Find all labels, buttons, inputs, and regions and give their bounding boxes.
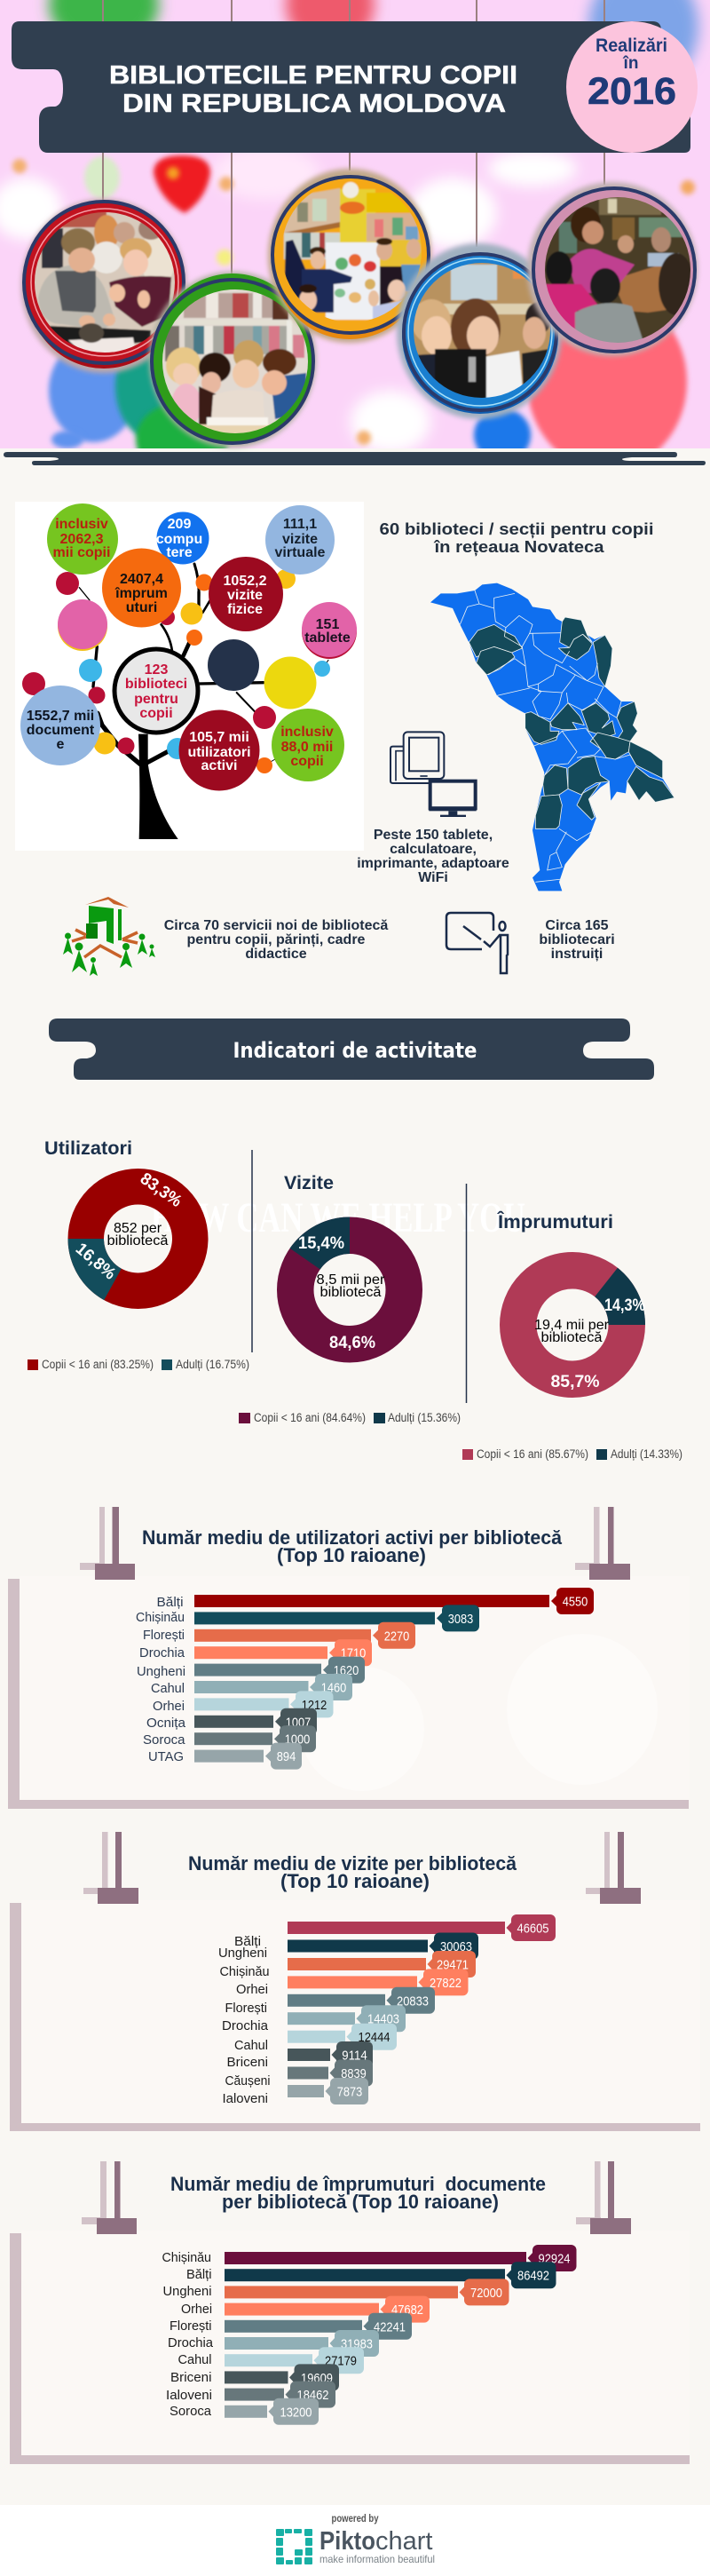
row: Drochia (168, 2330, 379, 2357)
row: Chișinău: 3083 (448, 1612, 473, 1627)
row: Florești (143, 1622, 415, 1649)
row: Briceni: Briceni (170, 2370, 211, 2385)
photo ornament 3: children with handprint poster (268, 169, 431, 343)
bar chart: loans per library (162, 2245, 577, 2425)
row: Drochia: 31983 (341, 2337, 373, 2351)
row: Briceni (227, 2041, 373, 2070)
bubble: 151 tablete: 151 (316, 617, 339, 632)
row: Soroca: Soroca (170, 2404, 212, 2419)
donut chart: Vizite: bibliotecă (320, 1285, 382, 1300)
bubble: 1552,7 mii documente: 1552,7 mii (27, 709, 94, 724)
donut chart: Împrumuturi: 85,7% (550, 1373, 600, 1391)
row: Orhei: 47682 (391, 2303, 423, 2318)
heading: Vizite: Vizite (284, 1173, 334, 1193)
row: Căușeni: 8839 (341, 2066, 367, 2081)
footer (0, 2505, 710, 2576)
row: Drochia: Drochia (222, 2018, 269, 2033)
text: new services: pentru copii, părinți, cadre (187, 932, 366, 947)
row: Ungheni (218, 1932, 478, 1961)
row: Cahul: Cahul (151, 1681, 185, 1696)
dividers (252, 1150, 467, 1403)
text: equipment: imprimante, adaptoare (357, 856, 509, 871)
bubble: 2407,4 împrumuturi: 2407,4 (120, 572, 163, 587)
donut chart: Vizite: 84,6% (329, 1334, 375, 1352)
donut chart: Împrumuturi (462, 1211, 682, 1461)
row: Bălți (234, 1914, 556, 1949)
bubble: 1552,7 mii documente (20, 686, 100, 765)
row: Ocnița: Ocnița (146, 1716, 186, 1731)
donut chart: Utilizatori: 16,8% (72, 1240, 119, 1284)
bubble: 1052,2 vizite fizice: fizice (227, 602, 263, 617)
text: trained librarians: Circa 165 (545, 918, 609, 933)
badge: Realizări în 2016: Realizări (596, 36, 667, 56)
bubble: 151 tablete (302, 602, 357, 659)
header bottom bar (4, 452, 706, 465)
row: Soroca: 13200 (280, 2405, 312, 2420)
row: Cahul: 27179 (325, 2354, 357, 2369)
panel: statistics tree (15, 502, 364, 851)
bubble: inclusiv 88,0 mii copii (272, 709, 344, 781)
row: Chișinău (136, 1605, 479, 1631)
bubble: 1052,2 vizite fizice: 1052,2 (224, 574, 267, 589)
row: Ialoveni (166, 2382, 335, 2408)
row: Briceni: 19609 (301, 2371, 333, 2386)
map: blue districts (430, 583, 674, 891)
donut chart: Utilizatori: 83,3% (137, 1169, 185, 1211)
bubble: inclusiv 88,0 mii copii: 88,0 mii (281, 740, 333, 755)
heading: chart 2: (Top 10 raioane) (280, 1870, 430, 1892)
row: Ialoveni: 7873 (337, 2085, 362, 2099)
legend: Copii < 16 ani (83.25%) (42, 1358, 154, 1371)
donut chart: Utilizatori: 852 per (114, 1221, 162, 1236)
bubble: 105,7 mii utilizatori activi: activi (201, 758, 237, 773)
bubble: 1052,2 vizite fizice: vizite (227, 588, 263, 603)
row: Orhei (153, 1691, 334, 1717)
row: Ungheni: 72000 (470, 2286, 502, 2301)
row: Cahul: 1460 (321, 1680, 346, 1696)
bubble: 105,7 mii utilizatori activi: 105,7 mii (189, 730, 249, 745)
donut chart: Vizite (239, 1173, 461, 1424)
bubble: inclusiv 2062,3 mii copii: inclusiv (55, 517, 108, 532)
row: Drochia (222, 2005, 406, 2033)
icon: tablets and monitor (390, 732, 477, 817)
row: Drochia (139, 1639, 372, 1666)
legend (28, 1358, 249, 1371)
donut chart: Împrumuturi: 14,3% (604, 1296, 645, 1315)
row: Ialoveni: Ialoveni (166, 2388, 212, 2403)
section banner: Indicatori de activitate (49, 1019, 654, 1080)
main title (109, 61, 517, 118)
tree trunk and branches (79, 564, 328, 839)
section banner: Indicatori de activitate: Indicatori de activitate (233, 1038, 477, 1063)
row: Ungheni: Ungheni (163, 2284, 211, 2299)
heading: chart 2: Număr mediu de vizite per bibliotecă (188, 1852, 517, 1875)
row: Florești (225, 1987, 435, 2016)
text: equipment: calculatoare, (390, 842, 477, 857)
photo ornament 5: children around a table (527, 182, 698, 356)
row: Drochia: 14403 (367, 2012, 399, 2027)
bubble: inclusiv 88,0 mii copii: inclusiv (280, 725, 334, 740)
row: Chișinău: Chișinău (136, 1610, 185, 1625)
row: Căușeni (225, 2060, 373, 2089)
frame decoration: chart 2 (10, 1832, 700, 2131)
bubble: inclusiv 88,0 mii copii: copii (290, 754, 324, 769)
donut chart: Împrumuturi: 19,4 mii per (534, 1318, 610, 1333)
text: equipment (357, 828, 509, 885)
donut chart: Împrumuturi: bibliotecă (541, 1330, 603, 1345)
bubble: 209 computere (156, 511, 209, 565)
heading: Împrumuturi: Împrumuturi (497, 1211, 613, 1233)
row: Chișinău: Chișinău (162, 2250, 211, 2265)
row: Chișinău (162, 2245, 577, 2271)
row: Chișinău: 29471 (437, 1957, 469, 1973)
row: Florești: 42241 (374, 2319, 406, 2334)
row: Chișinău: Chișinău (220, 1964, 270, 1979)
text: new services: didactice (245, 947, 307, 962)
badge: Realizări în 2016: în (623, 54, 638, 73)
donut chart: Utilizatori (28, 1138, 249, 1371)
row: UTAG (148, 1743, 302, 1770)
heading: chart 3: Număr mediu de împrumuturi documente (170, 2173, 546, 2195)
Piktochart wordmark: make information beautiful (320, 2553, 435, 2565)
heading: chart 1: Număr mediu de utilizatori activi per bibliotecă (142, 1526, 563, 1549)
row: Bălți (186, 2262, 556, 2288)
map of Moldova (430, 583, 674, 891)
row: UTAG: UTAG (148, 1749, 184, 1764)
heading: chart 3: per bibliotecă (Top 10 raioane) (222, 2191, 499, 2213)
badge: Realizări în 2016 (566, 21, 698, 153)
row: Briceni: 9114 (342, 2048, 367, 2064)
icon: Piktochart logo (276, 2529, 312, 2564)
row: Bălți: 46605 (517, 1922, 548, 1936)
bar chart: visits per library (218, 1914, 556, 2106)
row: Bălți: Bălți (234, 1934, 261, 1949)
text: trained librarians (539, 918, 615, 962)
donut chart: Vizite: 15,4% (298, 1234, 344, 1253)
heading: chart 1 (142, 1526, 563, 1566)
row: Ungheni (163, 2279, 509, 2305)
bubble: inclusiv 2062,3 mii copii (47, 503, 118, 575)
row: Ungheni: Ungheni (137, 1664, 185, 1679)
bubble: inclusiv 2062,3 mii copii: mii copii (53, 545, 110, 560)
row: Ialoveni (222, 2078, 368, 2106)
bubble: 209 computere: compu (156, 532, 202, 547)
row: Bălți: 86492 (517, 2269, 549, 2284)
chart panels soft background (20, 1576, 700, 2455)
bubble: 111,1 vizite virtuale: vizite (282, 532, 318, 547)
heading: chart 1: (Top 10 raioane) (277, 1544, 426, 1566)
row: Orhei: 27822 (430, 1976, 462, 1991)
row: Soroca (170, 2398, 319, 2425)
bubble: 2407,4 împrumuturi: uturi (126, 600, 157, 615)
row: Orhei: 1212 (302, 1698, 327, 1713)
legend: Adulți (14.33%) (611, 1447, 682, 1461)
row: Chișinău: 92924 (538, 2252, 570, 2266)
ornament strings (103, 0, 604, 275)
bubble: 1552,7 mii documente: e (57, 737, 65, 752)
row: Orhei (181, 2296, 430, 2323)
row: Soroca: Soroca (143, 1732, 185, 1748)
legend: Copii < 16 ani (85.67%) (477, 1447, 588, 1461)
bubble: 105,7 mii utilizatori activi: utilizatori (187, 745, 251, 760)
faint background slogan: HOW CAN WE HELP YOU (151, 1194, 525, 1241)
bubble: 111,1 vizite virtuale: 111,1 (283, 517, 317, 532)
bubble: 123 biblioteci pentru copii: copii (139, 706, 173, 721)
row: Orhei: Orhei (153, 1699, 185, 1714)
row: Florești: 20833 (397, 1993, 429, 2009)
main title: DIN REPUBLICA MOLDOVA (122, 90, 506, 118)
heading: Novateca network (380, 520, 653, 556)
row: Ocnița: 1007 (286, 1715, 311, 1730)
text: equipment: Peste 150 tablete, (374, 828, 493, 843)
text: trained librarians: instruiți (551, 947, 603, 962)
row: Cahul: Cahul (178, 2352, 211, 2367)
row: Drochia: 1710 (341, 1646, 366, 1661)
legend (239, 1411, 461, 1424)
bubble: 209 computere: tere (166, 545, 193, 560)
bubble: inclusiv 2062,3 mii copii: 2062,3 (60, 532, 104, 547)
bar chart: active users per library (136, 1588, 594, 1770)
small decorative tree circles (22, 569, 330, 773)
icon: green library with people (63, 897, 155, 976)
text: new services (164, 918, 388, 962)
row: Ialoveni: 18462 (296, 2388, 328, 2403)
legend (462, 1447, 682, 1461)
row: Căușeni: Căușeni (225, 2073, 270, 2089)
row: Florești: Florești (225, 2001, 267, 2016)
row: Briceni: Briceni (227, 2055, 268, 2070)
row: Ungheni: Ungheni (218, 1946, 267, 1961)
header: balloon background (0, 0, 710, 477)
row: Cahul: 12444 (359, 2030, 390, 2045)
bubble: 111,1 vizite virtuale: virtuale (275, 545, 326, 560)
faint circles behind chart 1 (300, 1634, 658, 1791)
map: district borders (460, 590, 636, 882)
heading: Utilizatori: Utilizatori (44, 1138, 132, 1159)
heading: Novateca network: 60 biblioteci / secții pentru copii (380, 520, 653, 538)
bubble: 111,1 vizite virtuale (265, 505, 335, 575)
row: Orhei: Orhei (181, 2302, 212, 2317)
row: Ungheni: 1620 (334, 1663, 359, 1678)
heading: chart 3 (170, 2173, 546, 2213)
bubble: 105,7 mii utilizatori activi (179, 710, 259, 790)
row: Ocnița (146, 1708, 317, 1735)
row: Ialoveni: Ialoveni (222, 2091, 268, 2106)
row: Cahul: Cahul (234, 2038, 268, 2053)
badge: Realizări în 2016: 2016 (588, 70, 676, 113)
text: trained librarians: bibliotecari (539, 932, 615, 947)
row: Ungheni (137, 1657, 365, 1684)
row: Cahul (151, 1674, 352, 1700)
row: Soroca (143, 1725, 316, 1752)
Piktochart wordmark: Piktochart (320, 2527, 432, 2556)
main title: BIBLIOTECILE PENTRU COPII (109, 61, 517, 90)
frame decoration: chart 1 (8, 1507, 689, 1809)
text: equipment: WiFi (418, 870, 448, 885)
row: Florești: 2270 (384, 1629, 409, 1644)
bubble: 123 biblioteci pentru copii: pentru (134, 692, 178, 707)
row: Orhei: Orhei (236, 1982, 268, 1997)
row: Drochia: Drochia (139, 1645, 185, 1661)
bubble: 2407,4 împrumuturi: împrum (114, 586, 168, 601)
bubble: 151 tablete: tablete (304, 630, 351, 646)
bubble: 2407,4 împrumuturi (102, 549, 181, 627)
legend: Copii < 16 ani (84.64%) (254, 1411, 366, 1424)
map: dark districts (469, 617, 674, 828)
title banner (12, 21, 690, 153)
row: Briceni (170, 2364, 339, 2390)
heading: Novateca network: în rețeaua Novateca (433, 538, 605, 556)
text: new services: Circa 70 servicii noi de bibliotecă (164, 918, 388, 933)
bubble: 123 biblioteci pentru copii: biblioteci (125, 677, 187, 692)
photo ornament 1: children crafting (21, 199, 186, 373)
row: Bălți (156, 1588, 594, 1614)
row: Florești: Florești (143, 1628, 185, 1643)
row: Soroca: 1000 (285, 1732, 310, 1748)
row: Cahul (234, 2024, 397, 2053)
frame decoration: chart 3 (10, 2161, 690, 2464)
donut chart: Utilizatori: bibliotecă (106, 1233, 169, 1248)
bubble: 123 biblioteci pentru copii (114, 649, 198, 733)
photo ornament 4: children with tablet (397, 243, 562, 419)
icon: trainer at board (446, 913, 508, 973)
bubble: 1052,2 vizite fizice (209, 557, 283, 631)
bubble: 209 computere: 209 (168, 517, 191, 532)
row: Florești: Florești (170, 2318, 211, 2334)
photo ornament 2: reading with teacher (149, 272, 316, 448)
row: Bălți: 4550 (563, 1595, 588, 1609)
row: Cahul (178, 2347, 364, 2374)
row: Bălți: Bălți (186, 2267, 211, 2282)
row: Florești (170, 2313, 412, 2340)
row: Drochia: Drochia (168, 2335, 214, 2350)
row: Ungheni: 30063 (440, 1939, 472, 1954)
powered by: powered by (332, 2512, 379, 2524)
heading: chart 2 (188, 1852, 517, 1892)
bubble: 123 biblioteci pentru copii: 123 (145, 662, 168, 678)
legend: Adulți (15.36%) (388, 1411, 461, 1424)
row: Chișinău (220, 1951, 476, 1979)
row: Orhei (236, 1969, 469, 1997)
bubble: 1552,7 mii documente: document (27, 723, 95, 738)
row: Bălți: Bălți (156, 1595, 183, 1610)
row: UTAG: 894 (277, 1749, 296, 1764)
donut chart: Vizite: 8,5 mii per (316, 1272, 385, 1288)
legend: Adulți (16.75%) (176, 1358, 249, 1371)
